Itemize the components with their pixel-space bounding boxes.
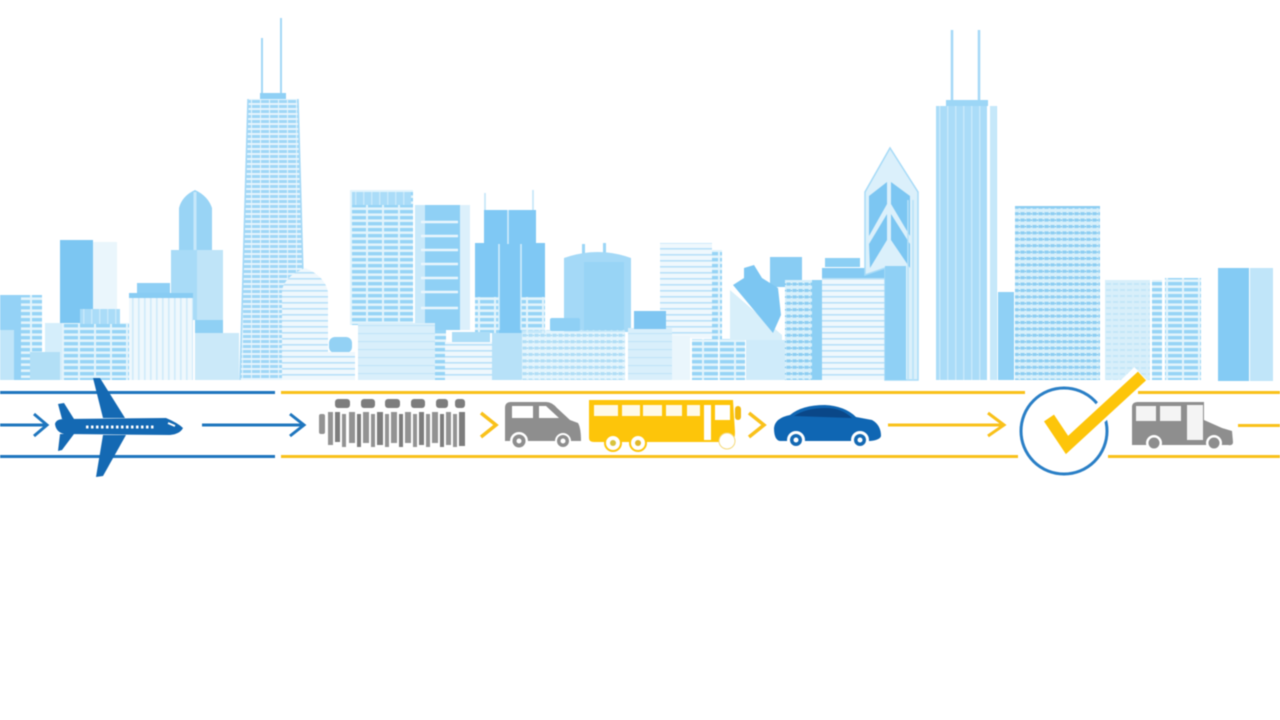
icon: group of people <box>319 399 465 447</box>
building: pale twin block <box>1105 278 1201 380</box>
building: tallest tower with antennas <box>936 30 997 380</box>
blue road section <box>0 391 304 458</box>
icon: yellow bus <box>589 400 741 451</box>
icon: checkmark in circle <box>1021 374 1142 474</box>
building: white banded block <box>822 258 885 380</box>
arrow: blue incoming <box>0 414 47 436</box>
building: angular blue roof <box>730 257 802 340</box>
building: two-tone tower <box>60 240 117 327</box>
icon: grey shuttle <box>1132 402 1233 451</box>
yellow road section <box>281 391 1280 458</box>
building: stepped twin-antenna tower <box>475 190 545 333</box>
building: pointed crown tower <box>865 148 918 380</box>
building: tall tapered tower with antennas <box>240 18 306 380</box>
arrow: yellow long <box>888 413 1004 436</box>
building: dotted block <box>785 280 822 380</box>
building: right edge block <box>1218 268 1273 381</box>
icon: grey van <box>505 402 581 450</box>
building: rounded roof block <box>564 243 631 332</box>
arrow: blue long <box>202 414 304 436</box>
head row <box>335 399 465 408</box>
building: white striped block <box>129 283 193 380</box>
body row <box>319 412 465 447</box>
building: low striped block <box>30 309 140 380</box>
building: gridded tower <box>350 190 413 325</box>
building: domed tower <box>171 190 239 380</box>
building: small blue block <box>998 292 1014 380</box>
building: left edge pair <box>0 295 42 380</box>
low-rise row <box>358 311 785 380</box>
building: large grid tower <box>1015 206 1100 380</box>
city skyline <box>0 18 1273 381</box>
building: small dome <box>328 337 355 380</box>
building: blue slatted tower <box>415 205 470 380</box>
chevron: yellow 2 <box>749 413 764 437</box>
building: pale striped tower <box>660 243 722 340</box>
icon: airplane <box>55 378 183 477</box>
chevron: yellow 1 <box>481 413 496 437</box>
building: rounded-top striped block <box>282 268 328 380</box>
icon: blue car <box>774 405 881 449</box>
arrow: yellow exit line <box>1238 424 1280 427</box>
